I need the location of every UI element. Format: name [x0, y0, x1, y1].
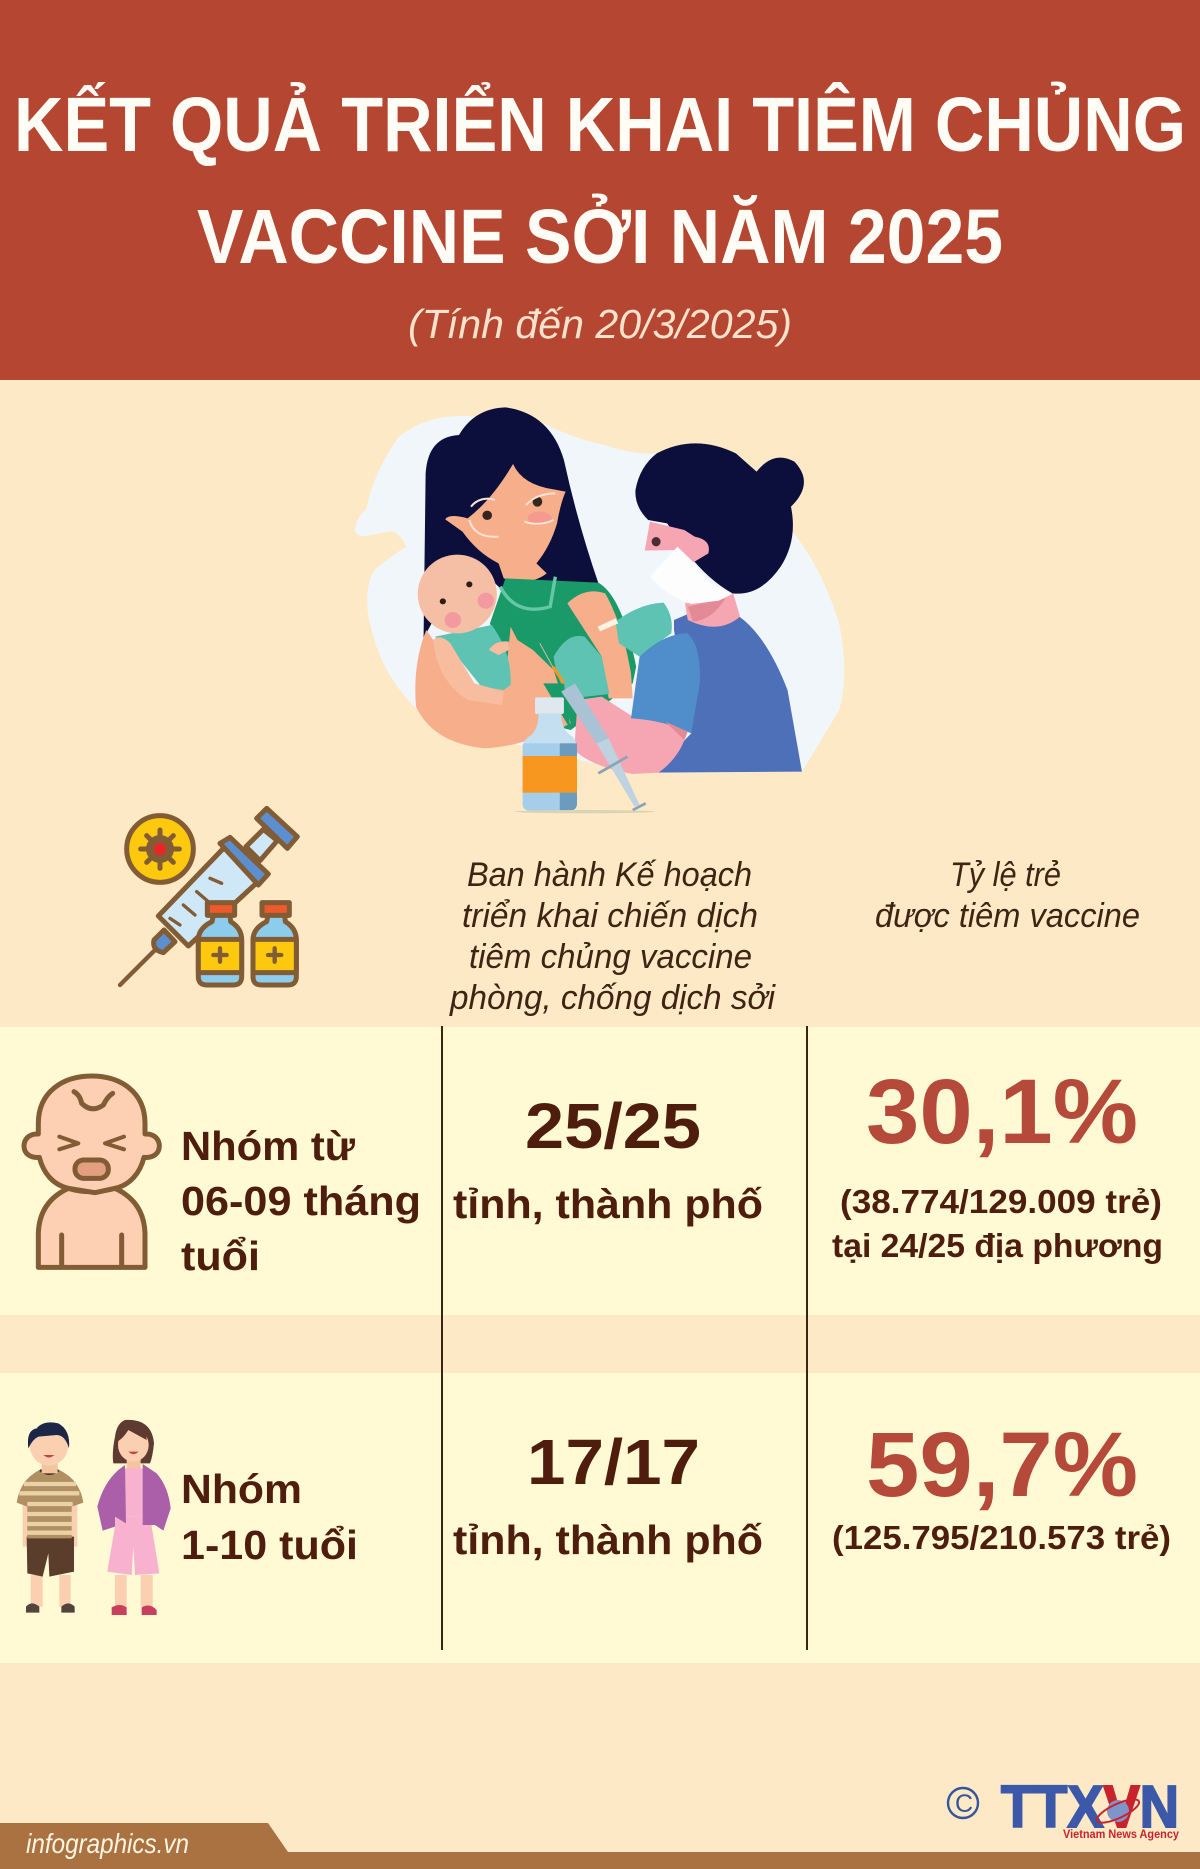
- stat: 25/25 provinces: 25/25: [525, 1090, 701, 1162]
- stat: 17/17 provinces: tỉnh, thành phố: [453, 1517, 763, 1563]
- subtitle: (Tính đến 20/3/2025): [408, 301, 792, 347]
- stat: 30,1 percent: (38.774/129.009 trẻ): [840, 1183, 1162, 1220]
- stat: 25/25 provinces: tỉnh, thành phố: [453, 1181, 763, 1227]
- stat: 59,7 percent: (125.795/210.573 trẻ): [832, 1519, 1171, 1556]
- icon: boy: [17, 1422, 83, 1613]
- title: VACCINE SỞI NĂM 2025: [197, 193, 1003, 280]
- label: group 06-09 months: tuổi: [181, 1233, 260, 1279]
- label: group 06-09 months: 06-09 tháng: [181, 1178, 421, 1224]
- footer source: infographics.vn: [26, 1828, 189, 1859]
- logo: TTXVN: Vietnam News Agency: [1063, 1829, 1180, 1841]
- column header: vaccination rate: được tiêm vaccine: [875, 897, 1140, 935]
- stat: 17/17 provinces: [453, 1426, 763, 1563]
- label: group 06-09 months: Nhóm từ: [181, 1123, 355, 1169]
- column header: campaign plan: tiêm chủng vaccine: [469, 938, 752, 976]
- panel: row 1 background: [0, 1027, 1200, 1315]
- panel: row 2 background: [0, 1373, 1200, 1663]
- stat: 30,1 percent: [832, 1061, 1163, 1264]
- logo: TTXVN: TTXVN: [1001, 1774, 1179, 1840]
- label: group 1-10 years: Nhóm: [181, 1466, 302, 1512]
- stat: 30,1 percent: tại 24/25 địa phương: [832, 1227, 1163, 1264]
- logo: TTXVN: C: [955, 1790, 973, 1818]
- stat: 59,7 percent: [832, 1414, 1171, 1556]
- column header: campaign plan: Ban hành Kế hoạch: [467, 856, 752, 894]
- column header: campaign plan: triển khai chiến dịch: [462, 897, 758, 935]
- title: [14, 81, 1186, 280]
- stat: 25/25 provinces: [453, 1090, 763, 1227]
- column header: campaign plan: phòng, chống dịch sởi: [449, 979, 776, 1017]
- label: group 1-10 years: 1-10 tuổi: [181, 1522, 358, 1568]
- stat: 30,1 percent: 30,1%: [866, 1061, 1138, 1163]
- stat: 59,7 percent: 59,7%: [866, 1414, 1138, 1516]
- icon: syringe, virus and vials: [120, 808, 297, 985]
- icon: virus: [127, 816, 193, 882]
- footer band: [0, 1823, 1200, 1869]
- icon: girl: [97, 1420, 171, 1615]
- icon: crying baby: [24, 1076, 159, 1267]
- header banner: [0, 0, 1200, 380]
- column header: vaccination rate: Tỷ lệ trẻ: [950, 856, 1061, 894]
- illustration: nurse vaccinating a baby held by mother: [355, 407, 844, 813]
- stat: 17/17 provinces: 17/17: [527, 1426, 700, 1498]
